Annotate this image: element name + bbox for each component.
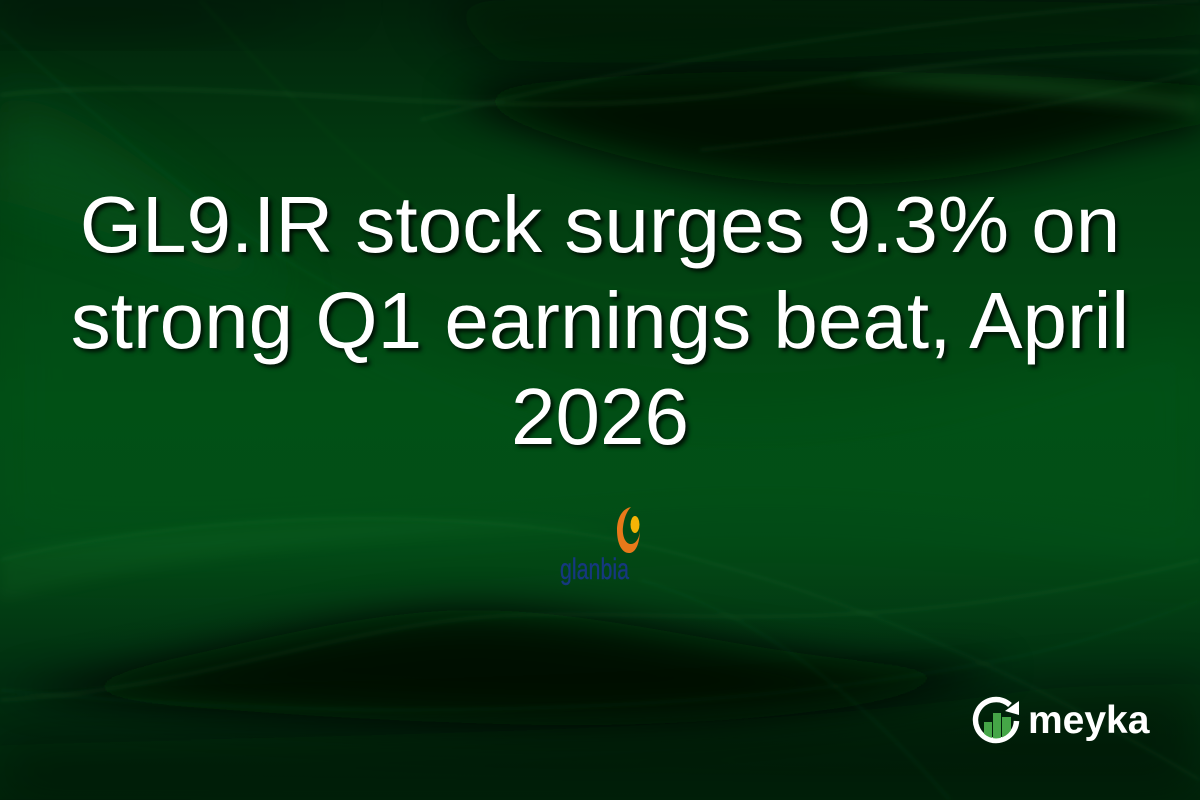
title <box>71 180 1129 461</box>
icon: circular arrow with bars <box>976 699 1019 742</box>
icon: glanbia logo <box>560 507 640 586</box>
title: strong Q1 earnings beat, April <box>71 276 1129 365</box>
brand name: meyka <box>1028 699 1150 742</box>
icon: orange crescent <box>617 507 640 553</box>
title: 2026 <box>511 372 689 461</box>
meyka brand logo <box>972 696 1150 744</box>
title: GL9.IR stock surges 9.3% on <box>80 180 1120 269</box>
icon: yellow dot <box>630 516 640 533</box>
